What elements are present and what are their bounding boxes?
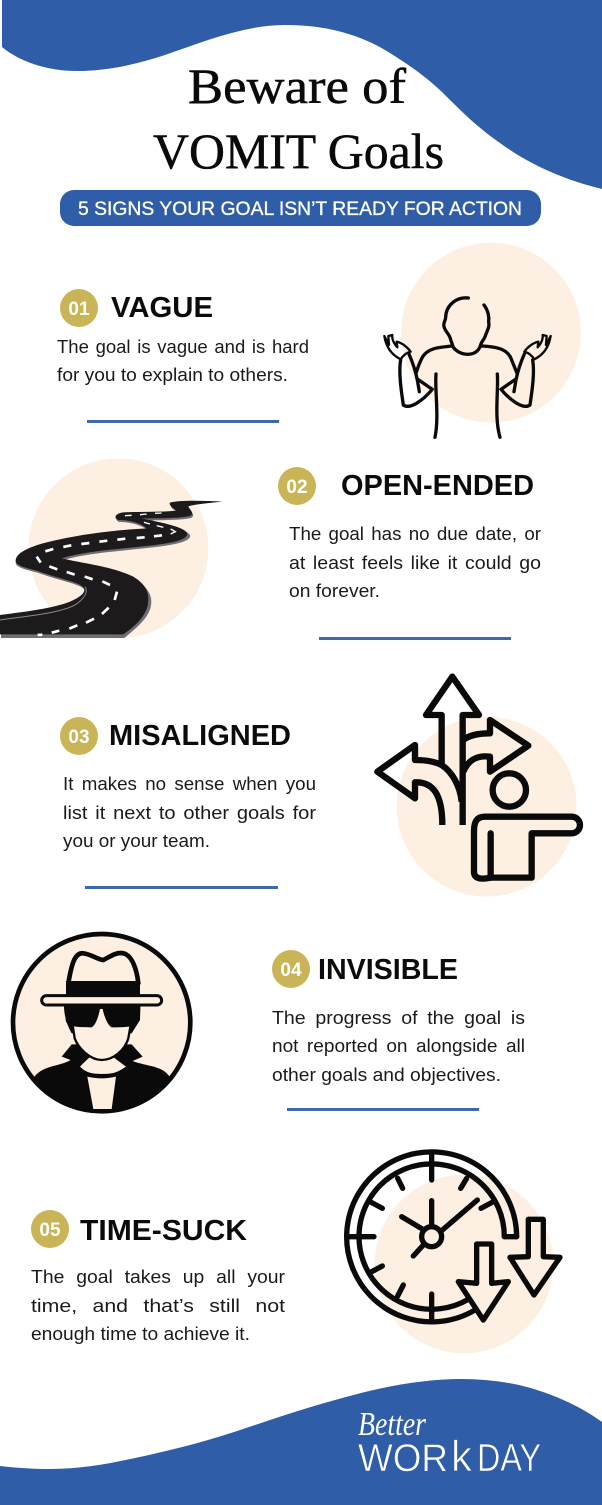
panel: 01 vague (57, 243, 581, 437)
body text: vague: The goal is vague and is hard (57, 337, 309, 357)
icon: clock with down arrows (347, 1152, 560, 1353)
number badge 04: 04 (280, 960, 302, 981)
body text: open-ended: on forever. (289, 581, 380, 601)
heading: vague: VAGUE (111, 292, 213, 324)
number badge 01: 01 (68, 299, 90, 320)
number badge 05: 05 (39, 1220, 61, 1241)
logo: Better Workday: Better (358, 1406, 427, 1443)
divider (319, 637, 511, 640)
heading: time-suck: TIME-SUCK (80, 1215, 247, 1247)
panel: 02 open-ended (0, 458, 541, 640)
number badge 02: 02 (286, 477, 308, 498)
heading: misaligned: MISALIGNED (109, 720, 291, 752)
number badge 03: 03 (68, 727, 90, 748)
body text: open-ended: The goal has no due date, or (289, 524, 541, 544)
subtitle pill (60, 190, 541, 226)
body text: invisible: other goals and objectives. (272, 1065, 501, 1085)
subtitle pill: 5 SIGNS YOUR GOAL ISN’T READY FOR ACTION (78, 198, 522, 220)
panel: 05 time-suck (31, 1152, 560, 1353)
number badge 02 (278, 467, 316, 505)
title: VOMIT Goals (153, 123, 444, 179)
body text: time-suck: enough time to achieve it. (31, 1324, 250, 1344)
number badge 04 (272, 950, 310, 988)
body text: misaligned: It makes no sense when you (63, 774, 316, 794)
icon: spy in hat and sunglasses (13, 934, 190, 1112)
top wave banner (2, 0, 602, 189)
body text: misaligned: list it next to other goals for (63, 803, 316, 823)
bottom wave banner (0, 1379, 602, 1505)
heading: open-ended: OPEN-ENDED (341, 470, 534, 502)
number badge 01 (60, 289, 98, 327)
body text: invisible (272, 1008, 525, 1085)
number badge 05 (31, 1210, 69, 1248)
body text: vague (57, 337, 309, 385)
divider (87, 420, 279, 423)
title: Beware of (188, 58, 406, 114)
logo: Better Workday: k (451, 1432, 473, 1481)
icon: shrugging person (384, 243, 581, 437)
divider (85, 886, 278, 889)
body text: misaligned: you or your team. (63, 831, 210, 851)
number badge 03 (60, 717, 98, 755)
panel: 04 invisible (13, 934, 525, 1112)
logo: Better Workday (358, 1406, 541, 1481)
heading: invisible: INVISIBLE (318, 954, 458, 986)
divider (287, 1108, 479, 1111)
logo: Better Workday: DAY (477, 1437, 541, 1480)
logo: Better Workday: WOR (358, 1437, 448, 1480)
body text: time-suck: The goal takes up all your (31, 1267, 285, 1287)
icon: diverging arrows and person (377, 677, 580, 897)
body text: open-ended: at least feels like it could go (289, 553, 541, 573)
body text: misaligned (63, 774, 316, 851)
title (153, 58, 444, 179)
body text: open-ended (289, 524, 541, 601)
body text: vague: for you to explain to others. (57, 365, 288, 385)
panel: 03 misaligned (60, 677, 580, 897)
body text: time-suck: time, and that’s still not (31, 1296, 285, 1316)
body text: invisible: The progress of the goal is (272, 1008, 525, 1028)
body text: invisible: not reported on alongside all (272, 1036, 525, 1056)
icon: winding road (0, 458, 223, 638)
body text: time-suck (31, 1267, 285, 1344)
